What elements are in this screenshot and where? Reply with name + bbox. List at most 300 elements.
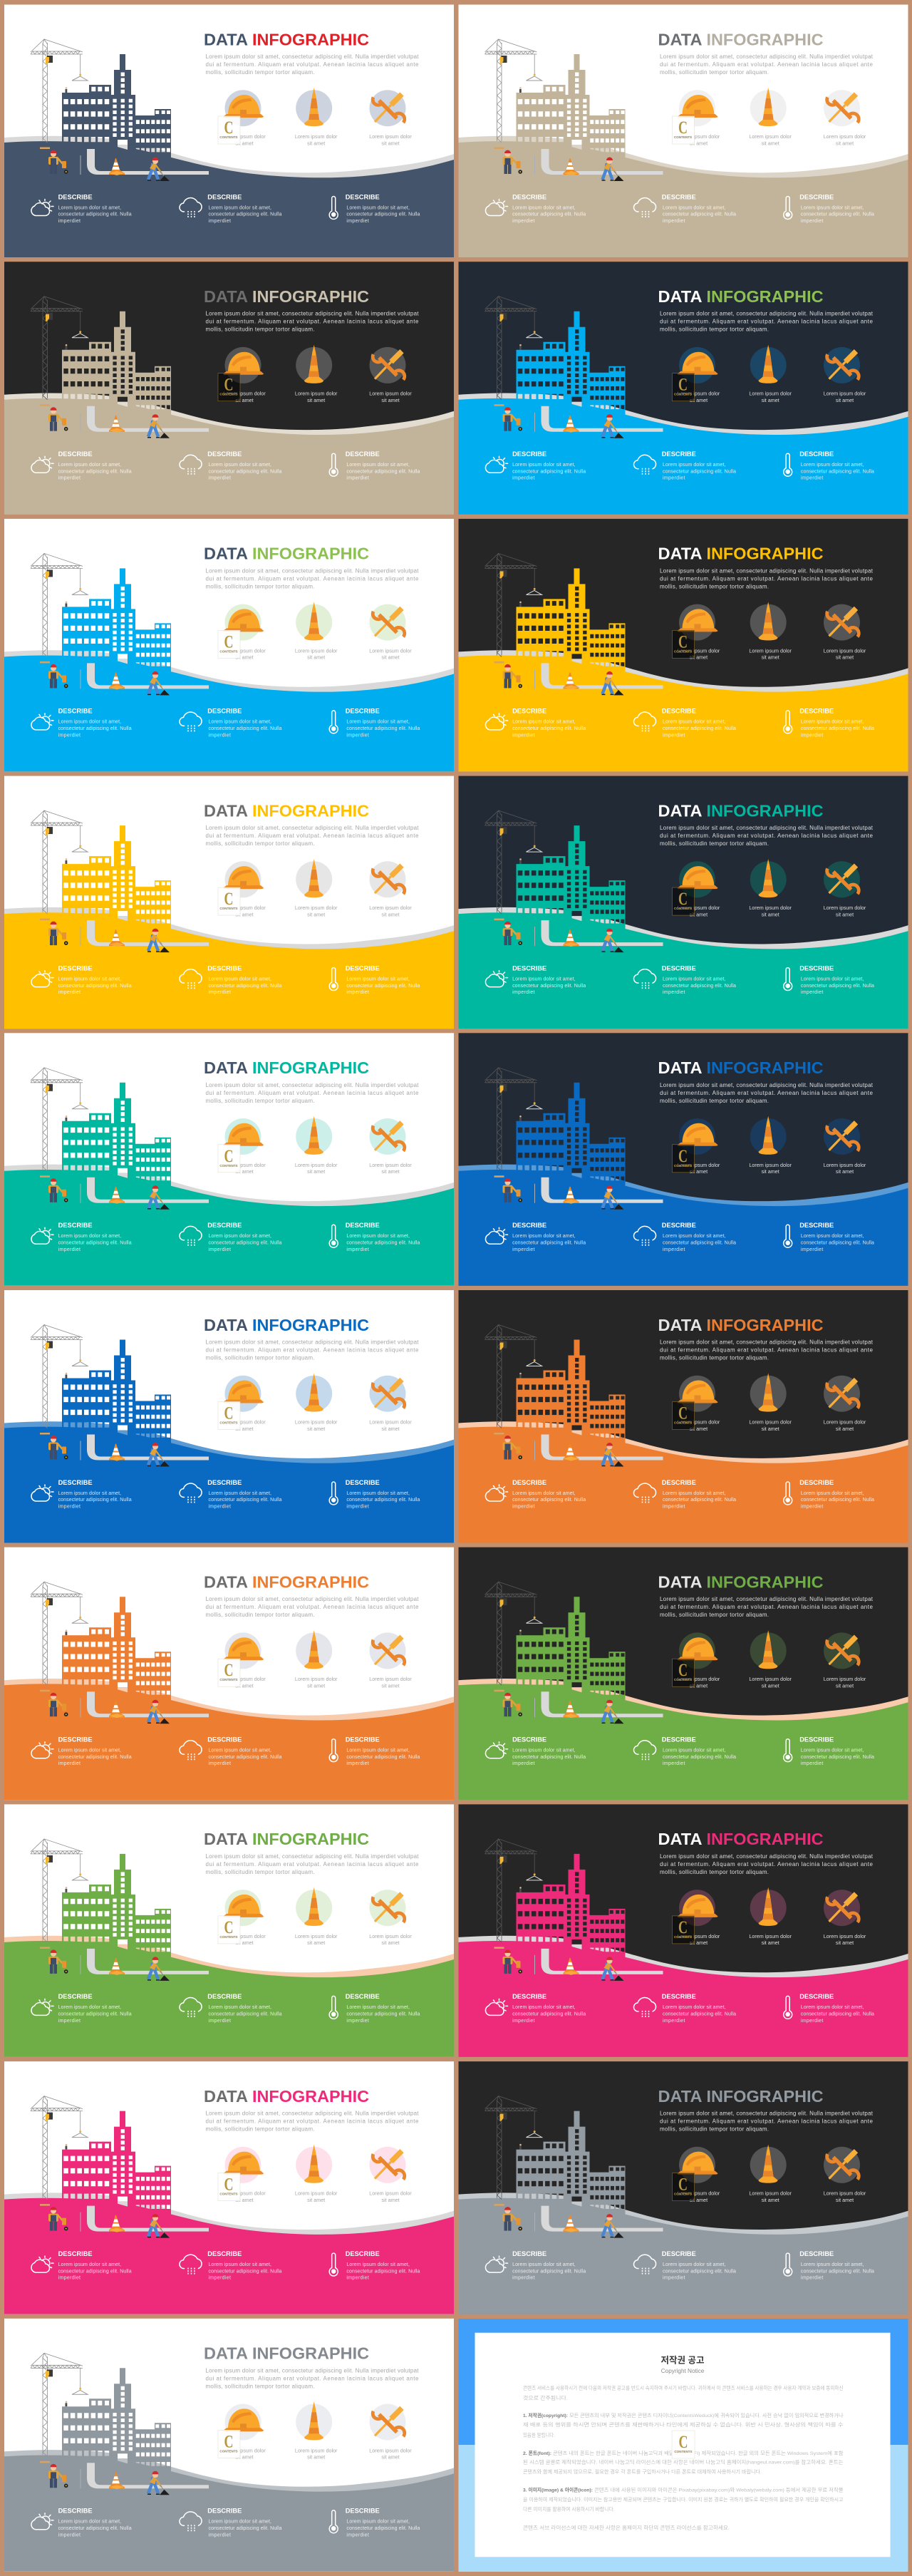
intro text: dui at fermentum. Aliquam erat volutpat. Aenean lacinia lacus aliquet ante (205, 1347, 419, 1353)
intro text: Lorem ipsum dolor sit amet, consectetur adipiscing elit. Nulla imperdiet volutpat (660, 53, 874, 60)
workers (40, 2461, 170, 2495)
white notice card (475, 2333, 891, 2557)
icon: hard hat (223, 1118, 264, 1155)
section 3: image and icon: 콘텐츠 내에 사용된 이미지와 아이콘은 Pixabay(pixabay.com)와 Webaly(webaly.com) 등에서 제공한 무료 저작물 (594, 2487, 844, 2493)
describe 3: imperdiet (801, 219, 823, 224)
icon: hard hat (678, 1118, 718, 1155)
panel background (4, 1547, 454, 1800)
panel background (4, 1033, 454, 1286)
captions: sit amet (836, 140, 854, 146)
describe 1: DESCRIBE (58, 964, 93, 972)
describe 2: DESCRIBE (207, 1736, 242, 1743)
panel: yellow on white (4, 776, 454, 1029)
intro text (660, 825, 874, 847)
icon: hard hat (223, 2147, 264, 2183)
describe 1: Lorem ipsum dolor sit amet, (58, 2520, 121, 2525)
panel background (459, 1033, 908, 1286)
panel background (459, 4, 908, 257)
describe 3: imperdiet (346, 476, 369, 481)
describe 1 (31, 1736, 132, 1766)
describe 3: imperdiet (801, 990, 823, 995)
describe 2 (633, 1736, 736, 1766)
describe 2: imperdiet (208, 990, 231, 995)
intro text: dui at fermentum. Aliquam erat volutpat. Aenean lacinia lacus aliquet ante (660, 2118, 874, 2125)
captions: Lorem ipsum dolor (369, 391, 412, 397)
icon: cone (750, 859, 787, 897)
describe 3: DESCRIBE (799, 2250, 834, 2257)
title (204, 1316, 369, 1334)
describe 1 (485, 1222, 586, 1252)
panel: sky blue on white (4, 519, 454, 771)
title: DATA (204, 2344, 248, 2363)
describe 1 (31, 1479, 132, 1510)
watermark: CONTENTS (219, 393, 238, 396)
captions: Lorem ipsum dolor (824, 905, 866, 911)
describe 1: imperdiet (512, 1247, 535, 1252)
describe 1: imperdiet (512, 219, 535, 224)
captions: Lorem ipsum dolor (824, 647, 866, 654)
title: DATA (658, 287, 703, 306)
captions: sit amet (307, 140, 325, 146)
captions: Lorem ipsum dolor (678, 2190, 720, 2197)
building (516, 1340, 626, 1447)
describe 3: DESCRIBE (346, 1222, 380, 1229)
intro text: mollis, sollicitudin tempor tortor aliquam. (660, 1098, 769, 1104)
watermark: C (678, 632, 688, 651)
watermark (218, 1916, 240, 1944)
ground wave (459, 1679, 908, 1800)
captions: sit amet (690, 654, 708, 661)
captions (678, 647, 866, 661)
traffic cone (109, 2472, 125, 2489)
describe 2: imperdiet (663, 1504, 685, 1510)
title: INFOGRAPHIC (252, 801, 369, 820)
describe 1: DESCRIBE (58, 1993, 93, 2000)
title: DATA (658, 30, 703, 48)
title (204, 545, 369, 563)
describe 3: Lorem ipsum dolor sit amet, (346, 1748, 410, 1753)
captions: sit amet (836, 397, 854, 403)
watermark: CONTENTS (674, 2450, 693, 2453)
intro text: dui at fermentum. Aliquam erat volutpat. Aenean lacinia lacus aliquet ante (205, 1604, 419, 1610)
describe 3: DESCRIBE (799, 708, 834, 715)
describe 2: imperdiet (663, 219, 685, 224)
describe 2: consectetur adipiscing elit. Nulla (208, 1755, 282, 1760)
describe 3: consectetur adipiscing elit. Nulla (801, 469, 874, 474)
describe 3: Lorem ipsum dolor sit amet, (801, 1748, 864, 1753)
describe 1 (31, 964, 132, 995)
watermark (673, 2173, 694, 2201)
describe 1: imperdiet (58, 219, 81, 224)
describe 2: Lorem ipsum dolor sit amet, (663, 205, 726, 210)
describe 1: DESCRIBE (58, 2250, 93, 2257)
describe 2: DESCRIBE (662, 2250, 696, 2257)
building (516, 2111, 626, 2218)
intro text (205, 1339, 419, 1361)
describe 3 (784, 708, 874, 738)
describe 2: imperdiet (663, 1247, 685, 1252)
describe 1: consectetur adipiscing elit. Nulla (58, 2012, 132, 2017)
describe 2: Lorem ipsum dolor sit amet, (208, 2262, 271, 2267)
traffic cone (563, 416, 579, 433)
describe 3: DESCRIBE (346, 2508, 380, 2515)
describe 3: DESCRIBE (799, 1993, 834, 2000)
icon: hard hat (678, 1632, 718, 1669)
icon: cone (296, 602, 332, 641)
intro text (205, 2367, 419, 2389)
watermark: C (678, 118, 688, 138)
traffic cone (563, 1701, 579, 1718)
describe 2: Lorem ipsum dolor sit amet, (663, 1491, 726, 1496)
describe 3: DESCRIBE (346, 964, 380, 972)
captions: sit amet (307, 654, 325, 661)
intro text (660, 1339, 874, 1361)
describe 1 (485, 2250, 586, 2281)
intro text: dui at fermentum. Aliquam erat volutpat. Aenean lacinia lacus aliquet ante (205, 575, 419, 582)
describe 3: consectetur adipiscing elit. Nulla (801, 1498, 874, 1503)
describe 3 (329, 1736, 420, 1766)
intro text: dui at fermentum. Aliquam erat volutpat. Aenean lacinia lacus aliquet ante (205, 2118, 419, 2125)
describe 3: DESCRIBE (346, 1993, 380, 2000)
describe 3: consectetur adipiscing elit. Nulla (346, 212, 420, 217)
section 2: font: 콘텐츠 내의 폰트는 한글 폰트는 네이버 나눔고딕과 배달의민족(UFI) 제작되었습니다. 한글 외의 모든 폰트는 Windows System에 포함 (553, 2450, 844, 2456)
describe 1: imperdiet (512, 2019, 535, 2024)
title: INFOGRAPHIC (252, 2087, 369, 2106)
tower crane (31, 2096, 88, 2200)
describe 3: Lorem ipsum dolor sit amet, (801, 1234, 864, 1239)
describe 3 (329, 1222, 420, 1252)
describe 1: DESCRIBE (512, 964, 546, 972)
captions: Lorem ipsum dolor (678, 1933, 720, 1939)
describe 2: Lorem ipsum dolor sit amet, (208, 205, 271, 210)
section 1: copyright: 재 배포 등의 행위를 하시면 안되며 콘텐츠를 재판매하거나 타인에게 제공하실 수 없습니다. 위반 시 민사상, 형사상의 책임이 따를 수 (523, 2421, 844, 2428)
describe 1: DESCRIBE (512, 1736, 546, 1743)
panel background (459, 262, 908, 515)
describe 2: consectetur adipiscing elit. Nulla (663, 1498, 736, 1503)
icon: cone (296, 1373, 332, 1412)
describe 3: imperdiet (801, 476, 823, 481)
describe 1: Lorem ipsum dolor sit amet, (58, 2005, 121, 2010)
captions (223, 905, 412, 917)
captions: Lorem ipsum dolor (749, 1162, 792, 1168)
describe 1 (31, 193, 132, 224)
describe 2: consectetur adipiscing elit. Nulla (663, 212, 736, 217)
watermark: CONTENTS (674, 1421, 692, 1424)
watermark: C (224, 2175, 233, 2194)
intro text: dui at fermentum. Aliquam erat volutpat. Aenean lacinia lacus aliquet ante (660, 319, 874, 325)
captions: Lorem ipsum dolor (295, 2447, 338, 2453)
describe 2 (180, 708, 282, 738)
captions: Lorem ipsum dolor (295, 2190, 338, 2197)
describe 1: Lorem ipsum dolor sit amet, (512, 2005, 576, 2010)
title: INFOGRAPHIC (252, 545, 369, 563)
icon: hard hat (223, 1376, 264, 1412)
ground wave (4, 1421, 454, 1542)
pipe (542, 2206, 663, 2232)
pipe (87, 1949, 209, 1974)
describe 1: DESCRIBE (512, 450, 546, 458)
describe 2: DESCRIBE (207, 2508, 242, 2515)
traffic cone (109, 1444, 125, 1461)
describe 1 (31, 708, 132, 738)
intro text: mollis, sollicitudin tempor tortor aliquam. (660, 1354, 769, 1361)
icon: cone (296, 1887, 332, 1926)
describe 3: Lorem ipsum dolor sit amet, (801, 2005, 864, 2010)
describe 3: consectetur adipiscing elit. Nulla (801, 212, 874, 217)
intro text: mollis, sollicitudin tempor tortor aliquam. (660, 583, 769, 589)
describe 3: imperdiet (801, 2019, 823, 2024)
describe 2: Lorem ipsum dolor sit amet, (208, 2520, 271, 2525)
describe 3: Lorem ipsum dolor sit amet, (801, 1491, 864, 1496)
describe 1: Lorem ipsum dolor sit amet, (512, 463, 576, 468)
captions: sit amet (307, 1939, 325, 1946)
describe 3: consectetur adipiscing elit. Nulla (346, 984, 420, 989)
captions (223, 1933, 412, 1946)
describe 2: Lorem ipsum dolor sit amet, (663, 463, 726, 468)
describe 3: imperdiet (801, 1247, 823, 1252)
workers (40, 404, 170, 438)
captions: sit amet (235, 397, 254, 403)
describe 3: Lorem ipsum dolor sit amet, (346, 977, 410, 982)
describe 2: Lorem ipsum dolor sit amet, (663, 2005, 726, 2010)
intro text: dui at fermentum. Aliquam erat volutpat. Aenean lacinia lacus aliquet ante (205, 1861, 419, 1867)
tower crane (31, 1839, 88, 1942)
captions (678, 1676, 866, 1689)
intro text (205, 1853, 419, 1875)
captions: Lorem ipsum dolor (749, 1676, 792, 1682)
building (62, 1083, 171, 1190)
watermark (218, 373, 240, 401)
describe 2: DESCRIBE (662, 1479, 696, 1486)
ground wave (4, 2450, 454, 2571)
icon: tools (369, 90, 406, 126)
describe 3 (784, 193, 874, 224)
captions: Lorem ipsum dolor (223, 2447, 266, 2453)
building (62, 2368, 171, 2475)
blue upper background (459, 2319, 908, 2445)
describe 3: consectetur adipiscing elit. Nulla (346, 1498, 420, 1503)
icon: cone (296, 2401, 332, 2441)
describe 1 (485, 1736, 586, 1766)
captions: Lorem ipsum dolor (295, 1676, 338, 1682)
describe 3: DESCRIBE (346, 2250, 380, 2257)
captions: sit amet (690, 1168, 708, 1175)
captions (223, 133, 412, 146)
describe 2: consectetur adipiscing elit. Nulla (663, 2012, 736, 2017)
captions: sit amet (235, 1168, 254, 1175)
describe 3: consectetur adipiscing elit. Nulla (801, 2269, 874, 2274)
captions: sit amet (836, 1168, 854, 1175)
describe 1 (31, 2508, 132, 2538)
tower crane (484, 1582, 542, 1685)
icon: tools (824, 1118, 860, 1155)
traffic cone (563, 158, 579, 175)
intro text: mollis, sollicitudin tempor tortor aliquam. (205, 1612, 315, 1618)
describe 1: Lorem ipsum dolor sit amet, (512, 1491, 576, 1496)
captions: sit amet (307, 911, 325, 917)
intro text: Lorem ipsum dolor sit amet, consectetur adipiscing elit. Nulla imperdiet volutpat (205, 1339, 419, 1346)
panel: yellow on dark (459, 519, 908, 771)
captions: sit amet (762, 2197, 779, 2203)
icon: tools (369, 1118, 406, 1155)
describe 1: DESCRIBE (58, 708, 93, 715)
icon: hard hat (223, 1890, 264, 1926)
title: DATA (658, 545, 703, 563)
describe 2: consectetur adipiscing elit. Nulla (663, 1755, 736, 1760)
captions: sit amet (381, 2197, 400, 2203)
ground wave (4, 650, 454, 771)
describe 1: DESCRIBE (58, 1222, 93, 1229)
describe 3: imperdiet (346, 1247, 369, 1252)
title: INFOGRAPHIC (707, 2087, 824, 2106)
workers (40, 2204, 170, 2238)
panel background (4, 4, 454, 257)
captions: Lorem ipsum dolor (749, 1418, 792, 1426)
describe 3: imperdiet (801, 2276, 823, 2281)
describe 1: consectetur adipiscing elit. Nulla (512, 2012, 586, 2017)
describe 2: imperdiet (208, 2533, 231, 2538)
describe 2 (633, 1222, 736, 1252)
title (658, 30, 824, 48)
icon: hard hat (223, 1632, 264, 1669)
captions: sit amet (762, 1939, 779, 1946)
title: INFOGRAPHIC (252, 1316, 369, 1334)
captions: sit amet (762, 397, 779, 403)
captions: sit amet (381, 1682, 400, 1689)
watermark: CONTENTS (219, 2449, 238, 2453)
tower crane (31, 297, 88, 400)
describe 2: consectetur adipiscing elit. Nulla (663, 726, 736, 731)
title (204, 287, 369, 306)
describe 3: consectetur adipiscing elit. Nulla (346, 726, 420, 731)
workers (494, 661, 624, 695)
ground wave (459, 136, 908, 257)
describe 2: DESCRIBE (207, 1993, 242, 2000)
intro text: mollis, sollicitudin tempor tortor aliquam. (205, 326, 315, 333)
describe 1: imperdiet (58, 990, 81, 995)
captions: sit amet (690, 140, 708, 146)
ground wave (459, 650, 908, 771)
captions: Lorem ipsum dolor (223, 647, 266, 654)
icon: hard hat (678, 347, 718, 383)
watermark: C (224, 2431, 233, 2451)
describe 1: consectetur adipiscing elit. Nulla (512, 1241, 586, 1246)
describe 1: imperdiet (512, 1504, 535, 1510)
title: INFOGRAPHIC (707, 30, 824, 48)
describe 3: DESCRIBE (346, 1479, 380, 1486)
describe 2: Lorem ipsum dolor sit amet, (663, 2262, 726, 2267)
watermark (218, 630, 240, 658)
watermark (218, 887, 240, 915)
workers (494, 919, 624, 952)
ground wave (4, 907, 454, 1029)
describe 1: Lorem ipsum dolor sit amet, (58, 1748, 121, 1753)
workers (494, 1947, 624, 1981)
traffic cone (563, 1444, 579, 1461)
traffic cone (563, 672, 579, 689)
captions: sit amet (235, 1682, 254, 1689)
icon: hard hat (678, 2147, 718, 2183)
captions: sit amet (762, 654, 779, 661)
describe 2 (633, 2250, 736, 2281)
panel: grey on white (4, 2319, 454, 2571)
describe 1: consectetur adipiscing elit. Nulla (58, 1755, 132, 1760)
workers (40, 1175, 170, 1210)
watermark: C (224, 1403, 233, 1423)
describe 1: consectetur adipiscing elit. Nulla (512, 212, 586, 217)
panel: orange on white (4, 1547, 454, 1800)
intro text: dui at fermentum. Aliquam erat volutpat. Aenean lacinia lacus aliquet ante (660, 575, 874, 582)
describe 1 (485, 450, 586, 481)
describe 2: Lorem ipsum dolor sit amet, (663, 720, 726, 725)
captions: Lorem ipsum dolor (223, 1933, 266, 1939)
captions: sit amet (836, 654, 854, 661)
watermark: CONTENTS (674, 907, 692, 910)
watermark: CONTENTS (219, 1678, 238, 1681)
describe 1: Lorem ipsum dolor sit amet, (58, 1234, 121, 1239)
panel: navy on white (4, 4, 454, 257)
captions: sit amet (762, 1426, 779, 1432)
describe 2: consectetur adipiscing elit. Nulla (208, 2012, 282, 2017)
describe 3: imperdiet (346, 2533, 369, 2538)
watermark: C (678, 1917, 688, 1937)
describe 1: DESCRIBE (58, 1479, 93, 1486)
describe 3: Lorem ipsum dolor sit amet, (346, 1491, 410, 1496)
describe 3: Lorem ipsum dolor sit amet, (801, 463, 864, 468)
watermark: C (678, 1146, 688, 1166)
describe 1 (485, 964, 586, 995)
describe 2 (180, 964, 282, 995)
captions: Lorem ipsum dolor (295, 1162, 338, 1168)
captions: Lorem ipsum dolor (678, 1418, 720, 1426)
describe 1 (485, 1479, 586, 1510)
watermark: CONTENTS (674, 1935, 692, 1939)
title (658, 1830, 824, 1848)
captions: sit amet (307, 1682, 325, 1689)
icon: cone (750, 1887, 787, 1926)
workers (40, 147, 170, 181)
intro text: mollis, sollicitudin tempor tortor aliquam. (205, 2383, 315, 2389)
watermark: CONTENTS (219, 135, 238, 139)
captions: Lorem ipsum dolor (749, 1933, 792, 1939)
describe 2: consectetur adipiscing elit. Nulla (208, 469, 282, 474)
section 2: font: 된 시스템 글꼴로 제작되었습니다. 네이버 나눔고딕 라이선스에 대한 사항은 네이버 나눔고딕 홈페이지(hangeul.naver.com)를 참고하세요. 폰트는 (523, 2459, 844, 2466)
captions: Lorem ipsum dolor (223, 905, 266, 911)
icon: tools (824, 861, 860, 897)
describe 1: consectetur adipiscing elit. Nulla (512, 1498, 586, 1503)
pipe (87, 920, 209, 946)
describe 2: consectetur adipiscing elit. Nulla (208, 212, 282, 217)
pipe (87, 406, 209, 432)
intro text: Lorem ipsum dolor sit amet, consectetur adipiscing elit. Nulla imperdiet volutpat (205, 1596, 419, 1602)
panel background (459, 519, 908, 771)
watermark: C (678, 375, 688, 394)
describe 1: consectetur adipiscing elit. Nulla (512, 1755, 586, 1760)
title: DATA (204, 1830, 248, 1848)
describe 3: Lorem ipsum dolor sit amet, (346, 2005, 410, 2010)
captions: Lorem ipsum dolor (824, 391, 866, 397)
describe 3 (329, 2508, 420, 2538)
pipe (542, 1949, 663, 1974)
intro text: Lorem ipsum dolor sit amet, consectetur adipiscing elit. Nulla imperdiet volutpat (660, 2111, 874, 2117)
describe 1: imperdiet (58, 2533, 81, 2538)
captions: sit amet (307, 1168, 325, 1175)
icon: tools (824, 604, 860, 641)
describe 1: Lorem ipsum dolor sit amet, (58, 720, 121, 725)
building (516, 568, 626, 675)
watermark: C (224, 375, 233, 394)
describe 3: imperdiet (346, 2019, 369, 2024)
